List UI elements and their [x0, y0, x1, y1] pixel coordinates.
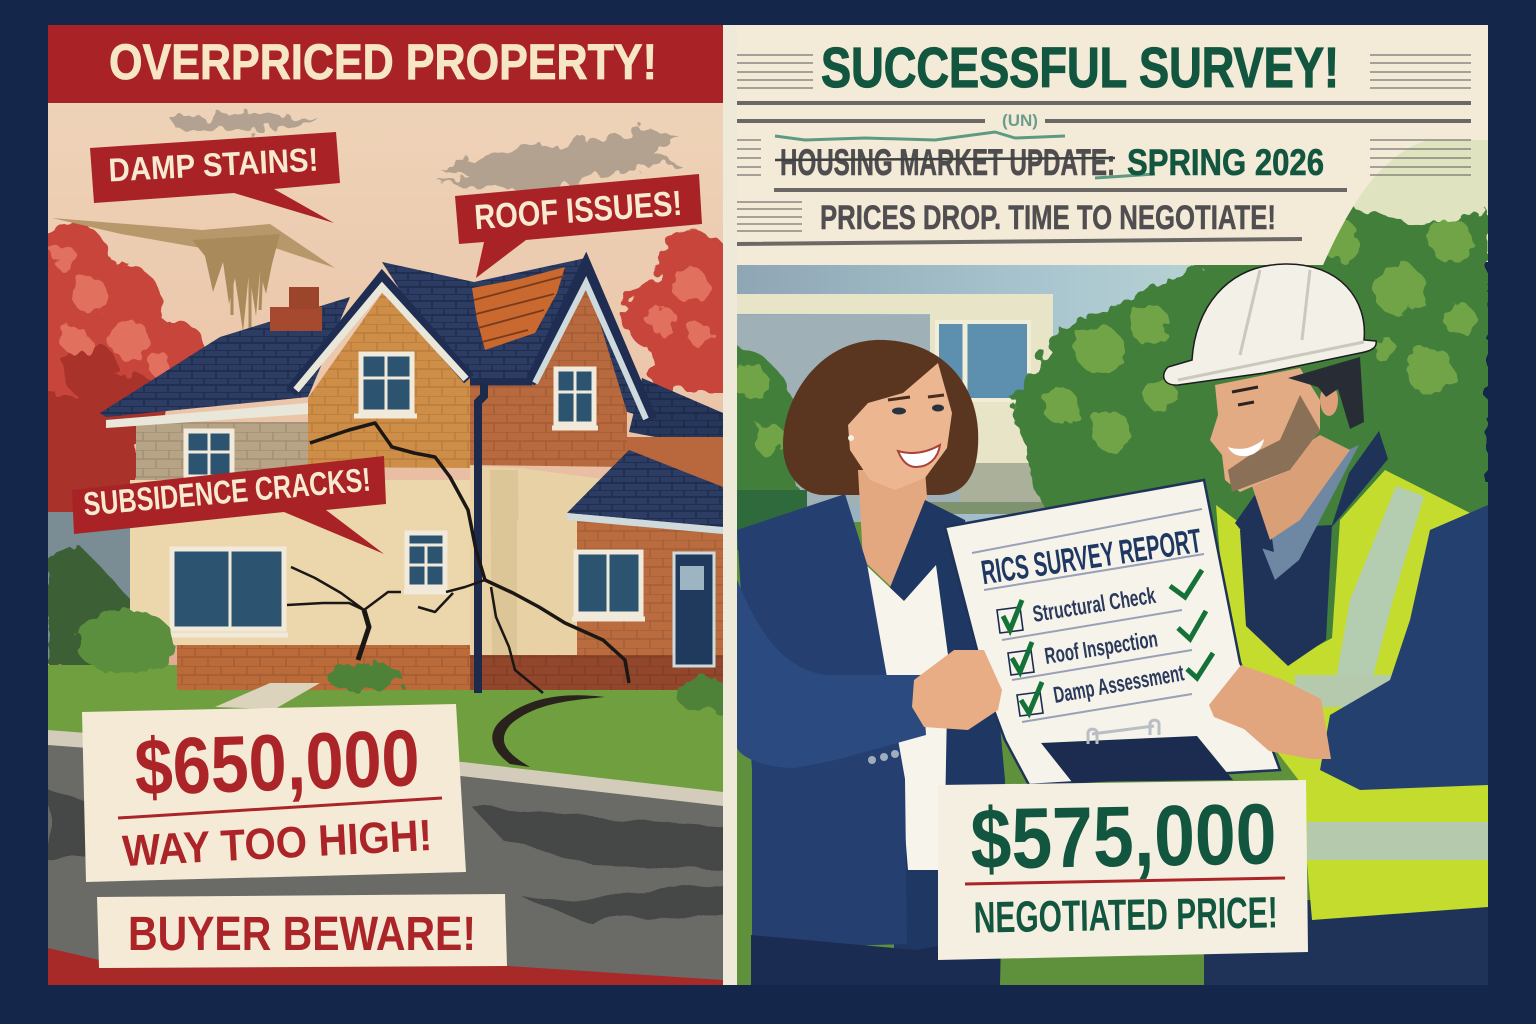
- road patches: [48, 790, 723, 924]
- ground: [737, 500, 1488, 985]
- main roof section: [382, 258, 655, 420]
- beard: [1228, 395, 1320, 492]
- windows: [172, 354, 641, 629]
- trousers: [751, 935, 1000, 985]
- checklist: Structural Check: [1031, 582, 1157, 627]
- red bottom strip: [48, 948, 723, 985]
- right tree: [1010, 205, 1488, 740]
- sweater: [1240, 525, 1332, 666]
- report document: [945, 480, 1280, 785]
- price card: 575,000: NEGOTIATED PRICE!: [973, 888, 1278, 943]
- left upper wall: [136, 422, 311, 482]
- sky: [48, 100, 723, 720]
- dark shrub: [48, 544, 130, 669]
- jacket collar: [1235, 431, 1388, 552]
- callout: damp stains: DAMP STAINS!: [108, 141, 319, 188]
- chimney: [270, 307, 322, 331]
- earring: [848, 435, 854, 441]
- left roof: [100, 297, 350, 417]
- callout: roof issues: [455, 174, 702, 278]
- main brick gable: [308, 293, 470, 468]
- sky: [737, 262, 1257, 522]
- callout: subsidence cracks: [72, 456, 386, 554]
- damp stain: [52, 218, 335, 332]
- vest stripes: [1336, 486, 1424, 680]
- building: [737, 294, 1060, 514]
- ear: [1320, 384, 1338, 416]
- exposed roof tiles: [472, 267, 565, 350]
- bushes: [75, 610, 733, 713]
- eyes: [892, 404, 944, 414]
- hair: [783, 340, 978, 495]
- panel: overpriced property: [28, 25, 749, 985]
- garden path: [215, 683, 320, 709]
- vest: [1216, 470, 1488, 920]
- left tree: [28, 223, 205, 520]
- gutter: [470, 378, 532, 386]
- headline: HOUSING MARKET UPDATE:: [780, 142, 1115, 183]
- rings: [1088, 720, 1159, 744]
- price card: 650,000: [82, 704, 466, 882]
- lower render: [130, 480, 475, 645]
- red header band: [48, 25, 723, 103]
- cracks: [287, 423, 629, 693]
- face: [848, 363, 952, 490]
- subheadline: PRICES DROP. TIME TO NEGOTIATE!: [820, 199, 1276, 237]
- lawn: [48, 665, 723, 800]
- hand: woman: [912, 650, 1002, 730]
- kerb: [48, 730, 723, 806]
- trees: red autumn: [28, 223, 749, 520]
- panel: successful survey: [730, 25, 1488, 985]
- price card: 650,000: $650,000: [133, 713, 421, 812]
- neck and chest: [858, 470, 940, 600]
- callout: roof issues: ROOF ISSUES!: [473, 184, 683, 237]
- callout: damp stains: [90, 132, 340, 223]
- left tree: [730, 345, 802, 540]
- house: [100, 258, 723, 693]
- report title: RICS SURVEY REPORT: [979, 522, 1204, 592]
- road: [48, 730, 723, 985]
- headline: SPRING 2026: [1127, 142, 1324, 183]
- price card: 575,000: $575,000: [970, 786, 1277, 888]
- title: SUCCESSFUL SURVEY!: [821, 36, 1339, 100]
- price card: 575,000: [938, 780, 1308, 960]
- header fade behind trees: [1300, 137, 1488, 262]
- trousers: [1204, 900, 1488, 985]
- brows: [888, 395, 944, 400]
- ground crack: [492, 695, 605, 767]
- price card: 650,000: WAY TOO HIGH!: [121, 811, 433, 876]
- eye and smile: [1232, 387, 1258, 405]
- checklist: [997, 570, 1213, 716]
- door: [674, 553, 714, 666]
- brick plinth: [177, 645, 470, 690]
- divider: [723, 25, 737, 985]
- warning card: buyer beware: [97, 894, 507, 968]
- smile: [898, 445, 940, 467]
- trees: [730, 205, 1488, 740]
- edition mark: (UN): [1002, 111, 1038, 130]
- warning card: buyer beware: BUYER BEWARE!: [128, 908, 476, 961]
- blazer right: [885, 500, 1005, 985]
- hard hat: [1164, 264, 1376, 385]
- checklist: Damp Assessment: [1051, 659, 1186, 708]
- far right roof and wall: [629, 378, 723, 437]
- callout: subsidence cracks: SUBSIDENCE CRACKS!: [82, 461, 372, 523]
- right brick bay wall: [577, 520, 723, 660]
- checklist: Roof Inspection: [1043, 625, 1159, 669]
- report rules: [972, 509, 1204, 722]
- downpipe: [478, 383, 484, 693]
- man: inspector: [1164, 264, 1488, 985]
- face: [1210, 368, 1320, 492]
- newspaper rules: [737, 55, 1471, 244]
- woman: client: [737, 340, 1005, 985]
- clipboard: [1041, 736, 1233, 782]
- window sills: [166, 416, 645, 635]
- blouse: [866, 565, 948, 870]
- storm clouds: [169, 108, 684, 190]
- sleeve: [1320, 505, 1488, 790]
- title: OVERPRICED PROPERTY!: [109, 34, 657, 90]
- cuff buttons: [868, 750, 899, 764]
- hat ridges: [1178, 270, 1364, 380]
- lower-left dark hedge: [737, 490, 807, 550]
- gable trim: [291, 279, 469, 392]
- hair: [1288, 357, 1364, 429]
- window bars: [186, 354, 608, 629]
- newspaper header: [737, 25, 1302, 265]
- hand: man: [1209, 665, 1331, 759]
- right tree: [624, 232, 749, 390]
- sleeve: [737, 580, 926, 768]
- blazer left: [737, 494, 907, 949]
- right brick gable: [470, 277, 627, 467]
- bay roof: [567, 450, 723, 527]
- neck: [1250, 435, 1350, 540]
- fence: [48, 512, 130, 662]
- shirt: [1259, 445, 1359, 580]
